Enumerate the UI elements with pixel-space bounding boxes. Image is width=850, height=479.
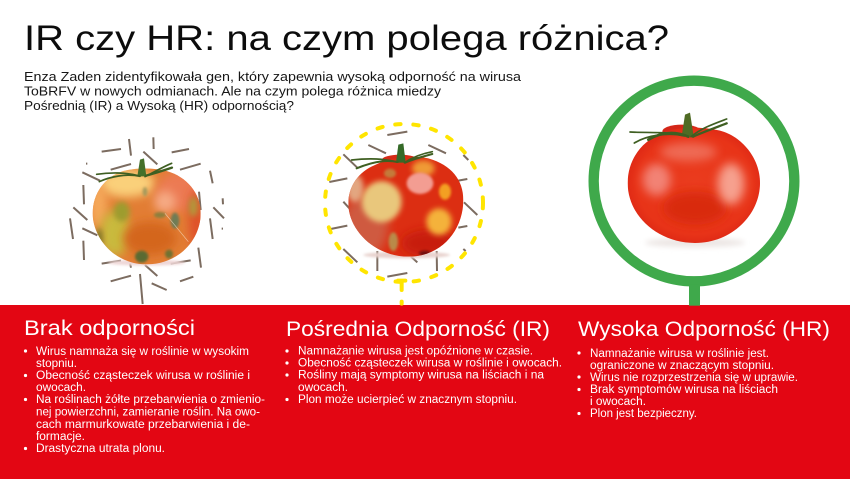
tomato shadow	[108, 260, 185, 266]
list: no resistance: Obecność cząsteczek wirusa w roślinie i	[36, 370, 250, 382]
list: no resistance	[24, 346, 265, 455]
list: intermediate resistance: Namnażanie wirusa jest opóźnione w czasie.	[298, 346, 533, 358]
list: high resistance: ograniczone w znaczącym stopniu.	[590, 360, 774, 372]
title: IR czy HR: na czym polega różnica?	[24, 19, 669, 58]
list: high resistance	[577, 348, 798, 420]
list: no resistance: owocach.	[36, 382, 86, 394]
list: intermediate resistance: Rośliny mają symptomy wirusa na liściach i na	[298, 370, 545, 382]
illustration: no resistance tomato with virus particles	[70, 137, 224, 304]
heading: no resistance: Brak odporności	[24, 317, 195, 340]
list: intermediate resistance: Obecność cząsteczek wirusa w roślinie i owocach.	[298, 358, 562, 370]
intro text: Pośrednią (IR) a Wysoką (HR) odpornością?	[24, 99, 294, 113]
green connector	[689, 285, 700, 306]
red information band	[0, 305, 850, 479]
heading: intermediate resistance: Pośrednia Odporność (IR)	[286, 318, 550, 341]
healthy tomato	[625, 113, 765, 245]
list: no resistance: Wirus namnaża się w roślinie w wysokim	[36, 346, 249, 358]
illustration: intermediate resistance tomato	[325, 124, 483, 304]
list: intermediate resistance: Plon może ucierpieć w znacznym stopniu.	[298, 394, 517, 406]
intro text: ToBRFV w nowych odmianach. Ale na czym polega różnica miedzy	[24, 84, 442, 98]
list: high resistance: i owocach.	[590, 396, 646, 408]
list: high resistance: Wirus nie rozprzestrzenia się w uprawie.	[590, 372, 798, 384]
intro text	[24, 70, 521, 113]
tomato shadow	[363, 252, 450, 258]
yellow connector	[398, 281, 405, 304]
list: high resistance: Plon jest bezpieczny.	[590, 408, 697, 420]
list: high resistance: Brak symptomów wirusa na liściach	[590, 384, 778, 396]
list: no resistance: stopniu.	[36, 358, 77, 370]
list: no resistance: cach marmurkowate przebarwienia i de-	[36, 419, 250, 431]
list: no resistance: Na roślinach żółte przebarwienia o zmienio-	[36, 394, 265, 406]
list: intermediate resistance: owocach.	[298, 382, 348, 394]
calyx	[630, 113, 727, 143]
list: high resistance: Namnażanie wirusa w roślinie jest.	[590, 348, 769, 360]
tomato shadow	[645, 238, 745, 247]
virus particles around tomato	[70, 137, 224, 304]
intro text: Enza Zaden zidentyfikowała gen, który zapewnia wysoką odporność na wirusa	[24, 70, 521, 84]
green ring	[594, 81, 794, 281]
virus particles	[329, 132, 477, 277]
diseased tomato	[89, 158, 205, 267]
calyx	[352, 143, 432, 168]
illustration: high resistance tomato	[594, 81, 794, 306]
affected tomato	[348, 143, 464, 257]
list: no resistance: Drastyczna utrata plonu.	[36, 443, 165, 455]
list: no resistance: formacje.	[36, 431, 85, 443]
dashed yellow ring	[325, 124, 483, 282]
list: intermediate resistance	[285, 346, 562, 406]
heading: high resistance: Wysoka Odporność (HR)	[578, 318, 830, 341]
list: no resistance: nej powierzchni, zamieranie roślin. Na owo-	[36, 406, 260, 418]
calyx	[97, 158, 172, 182]
